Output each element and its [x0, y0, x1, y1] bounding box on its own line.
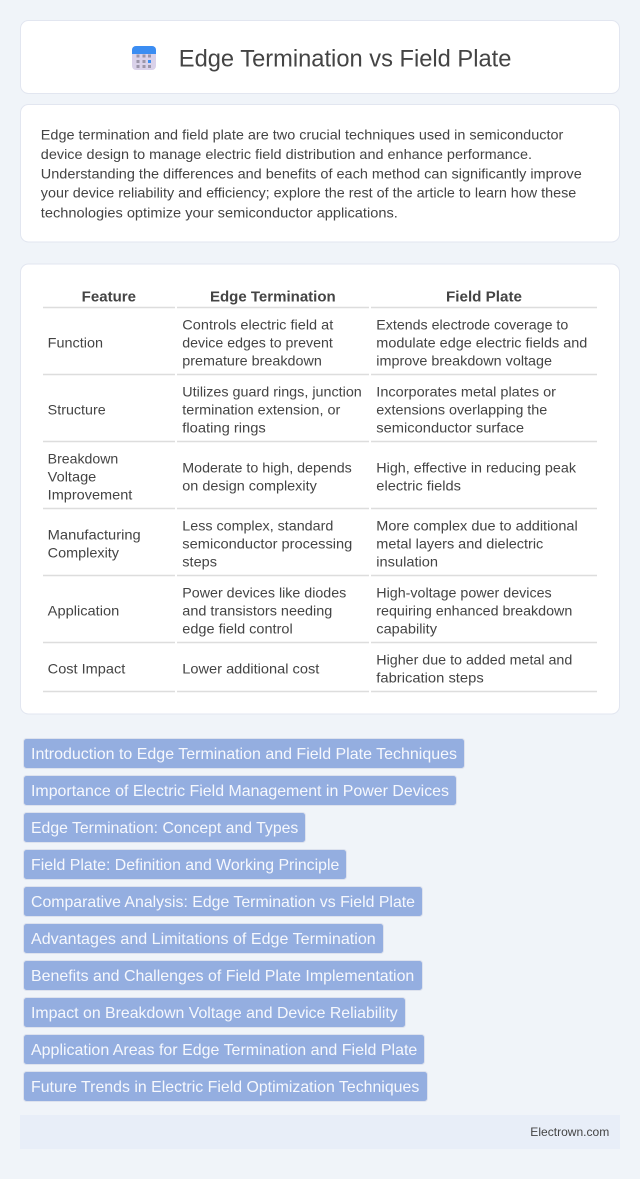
- title: Edge Termination vs Field Plate: [179, 46, 511, 73]
- topic pill 10: [24, 1072, 428, 1102]
- table row: function: Function: [48, 334, 103, 350]
- table row: function: improve breakdown voltage: [376, 352, 552, 368]
- panel: title card: [20, 20, 620, 94]
- footer: [20, 1115, 620, 1149]
- text block: intro paragraph: technologies optimize your semiconductor applications.: [41, 204, 398, 220]
- table row: cost impact: [48, 651, 572, 685]
- table row: manufacturing complexity: Manufacturing: [48, 526, 141, 542]
- table row: breakdown voltage improvement: [48, 450, 577, 502]
- text block: intro paragraph: Edge termination and field plate are two crucial techniques used in semiconductor: [41, 126, 564, 142]
- topic pill 9: Application Areas for Edge Termination and Field Plate: [31, 1042, 417, 1059]
- table row: manufacturing complexity: [48, 517, 578, 569]
- topic pill 3: [24, 812, 306, 842]
- table row: manufacturing complexity: insulation: [376, 553, 438, 569]
- table row: breakdown voltage improvement: Breakdown: [48, 450, 118, 466]
- table row: function: device edges to prevent: [182, 334, 333, 350]
- panel: comparison table: [20, 264, 620, 714]
- text block: intro paragraph: device design to manage electric field distribution and enhance performance.: [41, 146, 532, 162]
- table row: structure: Incorporates metal plates or: [376, 383, 556, 399]
- table row: function: modulate edge electric fields and: [376, 334, 587, 350]
- table row: application: [48, 584, 572, 636]
- panel: introduction: [20, 104, 620, 242]
- topic pill 2: Importance of Electric Field Management in Power Devices: [31, 783, 449, 800]
- table row: structure: extensions overlapping the: [376, 401, 548, 417]
- table row: application: capability: [376, 620, 437, 636]
- table row: cost impact: Higher due to added metal and: [376, 651, 572, 667]
- topic pill 1: [24, 738, 464, 768]
- topic pill 7: [24, 960, 422, 990]
- table row: application: requiring enhanced breakdown: [376, 602, 572, 618]
- table row: manufacturing complexity: semiconductor processing: [182, 535, 352, 551]
- topic pill 1: Introduction to Edge Termination and Field Plate Techniques: [31, 746, 457, 763]
- table row: structure: semiconductor surface: [376, 419, 524, 435]
- table row: manufacturing complexity: Less complex, standard: [182, 517, 333, 533]
- table row: application: Power devices like diodes: [182, 584, 346, 600]
- topic pill 5: [24, 886, 422, 916]
- table row: manufacturing complexity: metal layers and dielectric: [376, 535, 543, 551]
- table header: Edge Termination: [210, 289, 336, 306]
- table row: cost impact: Cost Impact: [48, 660, 125, 676]
- topic pill 6: Advantages and Limitations of Edge Termination: [31, 931, 376, 948]
- table row: application: and transistors needing: [182, 602, 332, 618]
- table row: application: edge field control: [182, 620, 293, 636]
- table row: application: High-voltage power devices: [376, 584, 552, 600]
- text block: intro paragraph: [41, 126, 582, 220]
- topic pill 4: [24, 850, 346, 880]
- table row: breakdown voltage improvement: Improvement: [48, 486, 132, 502]
- icon: calendar: [132, 46, 156, 70]
- table row: function: premature breakdown: [182, 352, 322, 368]
- topic pill 4: Field Plate: Definition and Working Principle: [31, 857, 339, 874]
- table row: structure: Structure: [48, 401, 106, 417]
- table header: Feature: [82, 289, 136, 306]
- table row: breakdown voltage improvement: Voltage: [48, 468, 97, 484]
- table row: manufacturing complexity: Complexity: [48, 544, 119, 560]
- table row: cost impact: Lower additional cost: [182, 660, 319, 676]
- topic pill 3: Edge Termination: Concept and Types: [31, 820, 298, 837]
- topic pill 7: Benefits and Challenges of Field Plate Implementation: [31, 968, 414, 985]
- table row: breakdown voltage improvement: electric fields: [376, 477, 461, 493]
- footer: Electrown.com: [530, 1125, 609, 1139]
- table row: breakdown voltage improvement: on design complexity: [182, 477, 317, 493]
- topic pill 8: [24, 998, 406, 1028]
- table row: function: [48, 316, 587, 368]
- table header: Field Plate: [446, 289, 522, 306]
- table row: cost impact: fabrication steps: [376, 669, 484, 685]
- topic pill 8: Impact on Breakdown Voltage and Device Reliability: [31, 1005, 398, 1022]
- topic pill 5: Comparative Analysis: Edge Termination vs Field Plate: [31, 894, 415, 911]
- topic pill 2: [24, 776, 456, 806]
- table row: application: Application: [48, 602, 119, 618]
- table row: breakdown voltage improvement: Moderate to high, depends: [182, 459, 352, 475]
- panel: topic list: [24, 738, 464, 1102]
- text block: intro paragraph: your device reliability and efficiency; explore the rest of the article to learn how these: [41, 185, 577, 201]
- table row: manufacturing complexity: More complex due to additional: [376, 517, 578, 533]
- topic pill 10: Future Trends in Electric Field Optimization Techniques: [31, 1079, 419, 1096]
- text block: intro paragraph: Understanding the differences and benefits of each method can significantly improve: [41, 165, 582, 181]
- topic pill 6: [24, 924, 384, 954]
- table row: function: Controls electric field at: [182, 316, 333, 332]
- table header: [82, 289, 522, 306]
- table row: manufacturing complexity: steps: [182, 553, 217, 569]
- table row: structure: termination extension, or: [182, 401, 341, 417]
- table row: structure: Utilizes guard rings, junction: [182, 383, 362, 399]
- table row: breakdown voltage improvement: High, effective in reducing peak: [376, 459, 577, 475]
- topic pill 9: [24, 1034, 424, 1064]
- table row: structure: [48, 383, 556, 435]
- table row: function: Extends electrode coverage to: [376, 316, 569, 332]
- table row: structure: floating rings: [182, 419, 266, 435]
